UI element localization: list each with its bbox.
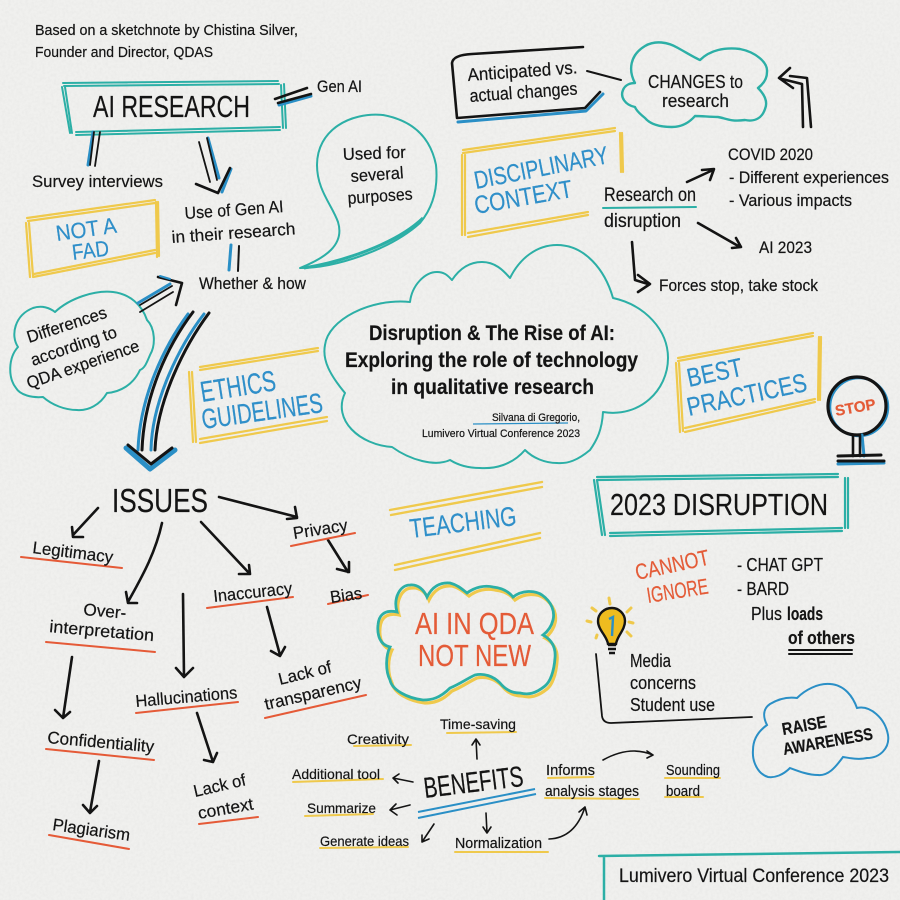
text: cannot ignore: CANNOT [633,545,711,585]
arrow: AI research to use of Gen AI [196,138,231,193]
issue labels: transparency [263,673,364,714]
cloud: raise awareness: AWARENESS [781,724,874,759]
benefit labels: Additional tool [292,766,380,782]
issue labels: interpretation [49,617,155,645]
text: AI 2023: AI 2023 [759,238,812,257]
panel: NOT A FAD: NOT A [54,213,118,246]
issue labels: Plagiarism [51,815,131,845]
title text: Exploring the role of technology [345,349,638,372]
cloud: differences according to QDA experience: QDA experience [24,336,142,393]
footer: conference label [599,852,900,900]
credit text [35,22,298,61]
credit text: Based on a sketchnote by Chistina Silver, [35,22,298,39]
cloud: AI in QDA not new [378,583,557,703]
panel: NOT A FAD [26,200,159,277]
cloud: differences according to QDA experience [10,292,154,410]
cloud: differences according to QDA experience: Differences [24,303,109,347]
list: tools: - CHAT GPT [737,555,823,575]
text: use of Gen AI [171,197,296,247]
text: media concerns: Media [630,651,672,671]
panel: AI RESEARCH heading box: AI RESEARCH [93,89,250,124]
connector: line to raise awareness [596,654,752,723]
red underlines [21,533,368,849]
issue labels: Lack of [192,770,248,801]
heading: BENEFITS: BENEFITS [422,761,525,805]
cloud: AI in QDA not new: AI IN QDA [415,606,534,641]
author credit: Lumivero Virtual Conference 2023 [422,428,580,440]
panel: central title cloud [324,245,668,468]
connector: Survey interviews: Survey interviews [32,172,163,191]
speech bubble: used for several purposes: purposes [347,185,413,208]
issue labels: Privacy [292,516,349,543]
issue labels: Over- [83,600,127,623]
benefit labels: Normalization [455,835,542,852]
credit text: Founder and Director, QDAS [35,44,213,61]
benefit labels: Sounding [666,762,720,779]
text: covid 2020 list: - Different experiences [729,168,889,187]
list: tools: loads [787,604,823,624]
cloud: changes to research [622,42,767,127]
author credit: Silvana di Gregorio, [492,412,580,424]
benefit labels: Generate ideas [320,833,409,849]
connector: Gen AI: Gen AI [317,77,362,96]
text: whether and how: Whether & how [199,274,307,293]
panel: ETHICS GUIDELINES [189,348,327,443]
arrow: to forces stop [632,242,650,292]
panel: TEACHING [390,482,542,570]
text: cannot ignore [633,545,711,608]
panel: DISCIPLINARY CONTEXT: CONTEXT [472,175,575,220]
title text: Disruption & The Rise of AI: [369,322,615,345]
callout: anticipated vs actual changes [452,47,621,122]
panel: BENEFITS [292,716,720,852]
title text [345,322,638,399]
list: tools: of others [788,628,855,648]
text: covid 2020 list: COVID 2020 [728,145,813,164]
footer: conference label: Lumivero Virtual Conference 2023 [619,866,889,887]
yellow underlines [293,732,720,852]
panel: ETHICS GUIDELINES: GUIDELINES [200,387,325,435]
cloud: AI in QDA not new: NOT NEW [418,638,532,673]
icon: stop sign [828,377,888,464]
issue labels: Legitimacy [32,538,115,567]
title text: in qualitative research [391,376,594,399]
cloud: raise awareness: RAISE [780,712,828,739]
connector: Gen AI [275,77,362,105]
list: tools: Plus [751,604,782,624]
text: covid 2020 list: - Various impacts [729,191,852,210]
text: media concerns [630,651,715,715]
issue labels: Lack of [276,657,334,689]
arrows between issues [55,497,349,813]
issue labels: Bias [329,584,363,607]
benefit labels: analysis stages [545,783,639,800]
benefit labels: Summarize [307,800,376,816]
speech bubble: used for several purposes: Used for [342,143,406,164]
text: covid 2020 list [728,145,889,210]
panel: 2023 DISRUPTION: 2023 DISRUPTION [610,487,828,522]
arrow: big curved arrow to issues [126,312,209,469]
benefit labels: Informs [546,762,595,779]
list: tools: - BARD [737,579,789,599]
panel: NOT A FAD: FAD [71,236,110,265]
cloud: raise awareness [753,684,888,777]
benefit arrows [390,739,653,842]
panel: BEST PRACTICES: PRACTICES [684,367,810,422]
benefit labels: board [666,783,700,800]
issue labels: Hallucinations [135,683,238,711]
arrow: covid to changes [779,68,811,127]
panel: DISCIPLINARY CONTEXT: DISCIPLINARY [472,141,611,195]
panel: ISSUES tree [21,482,368,849]
connector: Survey interviews [32,132,163,191]
cloud: differences according to QDA experience: according to [28,323,119,370]
callout: anticipated vs actual changes: actual changes [469,79,578,106]
callout: anticipated vs actual changes: Anticipated vs. [467,57,578,85]
issue labels: Inaccuracy [212,579,293,606]
issue labels: context [196,794,255,823]
text: research on disruption: Research on [604,185,696,206]
heading: BENEFITS [418,761,536,818]
panel: BEST PRACTICES [676,333,821,432]
icon: stop sign: STOP [834,396,877,420]
text: use of Gen AI: Use of Gen AI [184,197,284,223]
panel: AI RESEARCH heading box [62,81,286,135]
text: use of Gen AI: in their research [171,219,296,247]
benefit labels: Creativity [347,731,409,747]
cloud: changes to research: research [662,91,729,111]
benefit labels [292,716,720,852]
arrow: differences to whether and how [138,276,182,312]
panel: DISCIPLINARY CONTEXT [462,128,623,237]
text: cannot ignore: IGNORE [645,574,710,608]
text: media concerns: Student use [630,695,715,715]
icon: light bulb [587,598,633,653]
text: media concerns: concerns [630,673,696,693]
issue labels [32,516,364,845]
benefit labels: Time-saving [440,716,516,732]
arrow: to covid [687,169,714,182]
speech bubble: used for several purposes [300,115,437,268]
arrow: to AI 2023 [698,223,741,248]
heading: ISSUES: ISSUES [112,482,208,519]
text: research on disruption: disruption [604,211,681,232]
list: tools [737,555,855,654]
panel: BEST PRACTICES: BEST [684,352,745,393]
connector: use of Gen AI to whether and how [229,245,239,271]
issue labels: Confidentiality [47,728,155,756]
cloud: changes to research: CHANGES to [648,72,743,92]
panel: 2023 DISRUPTION [594,474,848,536]
text: research on disruption [603,185,696,232]
author credit [422,412,580,440]
panel: ETHICS GUIDELINES: ETHICS [198,365,278,409]
text: forces stop: Forces stop, take stock [659,276,818,295]
speech bubble: used for several purposes: several [350,163,404,186]
panel: TEACHING: TEACHING [408,501,518,544]
